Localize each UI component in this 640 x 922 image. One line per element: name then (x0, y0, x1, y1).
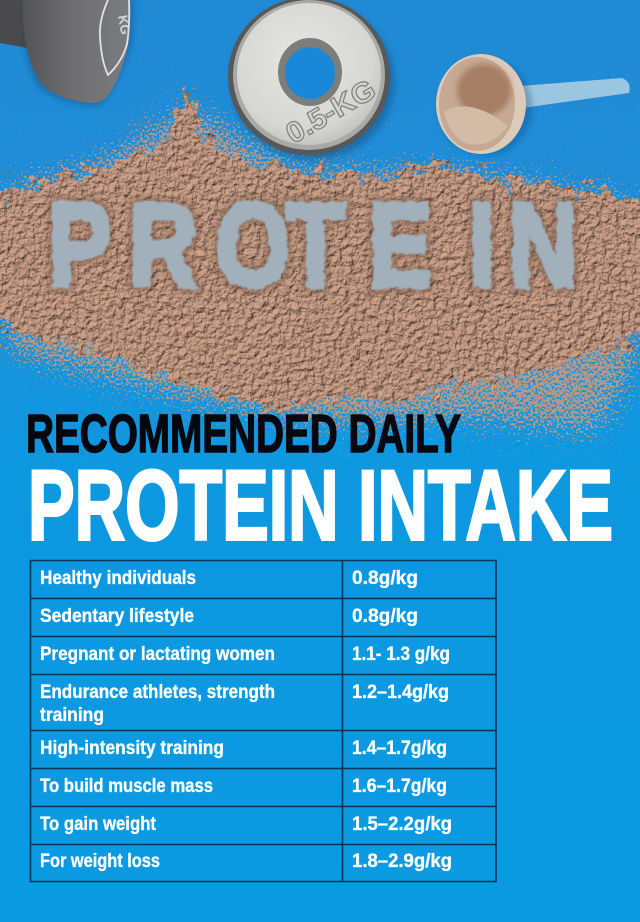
dumbbell weight mark: KG (115, 14, 133, 36)
heading: recommended daily: RECOMMENDED DAILY (26, 404, 461, 464)
row: to gain weight: To gain weight (40, 813, 156, 835)
row: to gain weight: 1.5–2.2g/kg (352, 813, 452, 835)
row: for weight loss: For weight loss (40, 850, 160, 872)
row: sedentary lifestyle (40, 605, 418, 627)
row: endurance athletes, strength training: 1.2–1.4g/kg (352, 681, 449, 703)
row: for weight loss: 1.8–2.9g/kg (352, 850, 452, 872)
row: pregnant or lactating women: 1.1- 1.3 g/kg (352, 643, 450, 665)
row: endurance athletes, strength training: training (40, 704, 104, 726)
word PROTEIN written in powder: PROTEIN (48, 178, 578, 311)
row: endurance athletes, strength training (40, 681, 449, 726)
row: to gain weight (40, 813, 452, 835)
table: protein intake by group (30, 560, 496, 882)
powder pile (0, 88, 640, 412)
row: pregnant or lactating women: Pregnant or lactating women (40, 643, 275, 665)
photo: protein powder with weights and scoop (0, 0, 640, 440)
icon: 0.5 kg weight plate (228, 0, 395, 160)
row: high-intensity training: High-intensity training (40, 737, 224, 759)
row: sedentary lifestyle: 0.8g/kg (352, 605, 418, 627)
row: to build muscle mass: To build muscle mass (40, 775, 213, 797)
row: healthy individuals (40, 567, 418, 589)
row: pregnant or lactating women (40, 643, 450, 665)
row: healthy individuals: 0.8g/kg (352, 567, 418, 589)
scattered powder dust (0, 100, 640, 440)
row: endurance athletes, strength training: Endurance athletes, strength (40, 681, 275, 703)
row: healthy individuals: Healthy individuals (40, 567, 196, 589)
icon: dumbbell (0, 0, 134, 106)
row: to build muscle mass (40, 775, 447, 797)
plate label: 0.5-KG (281, 74, 381, 150)
row: to build muscle mass: 1.6–1.7g/kg (352, 775, 447, 797)
row: high-intensity training (40, 737, 447, 759)
icon: scoop with powder (436, 54, 630, 156)
row: for weight loss (40, 850, 452, 872)
row: sedentary lifestyle: Sedentary lifestyle (40, 605, 194, 627)
row: high-intensity training: 1.4–1.7g/kg (352, 737, 447, 759)
